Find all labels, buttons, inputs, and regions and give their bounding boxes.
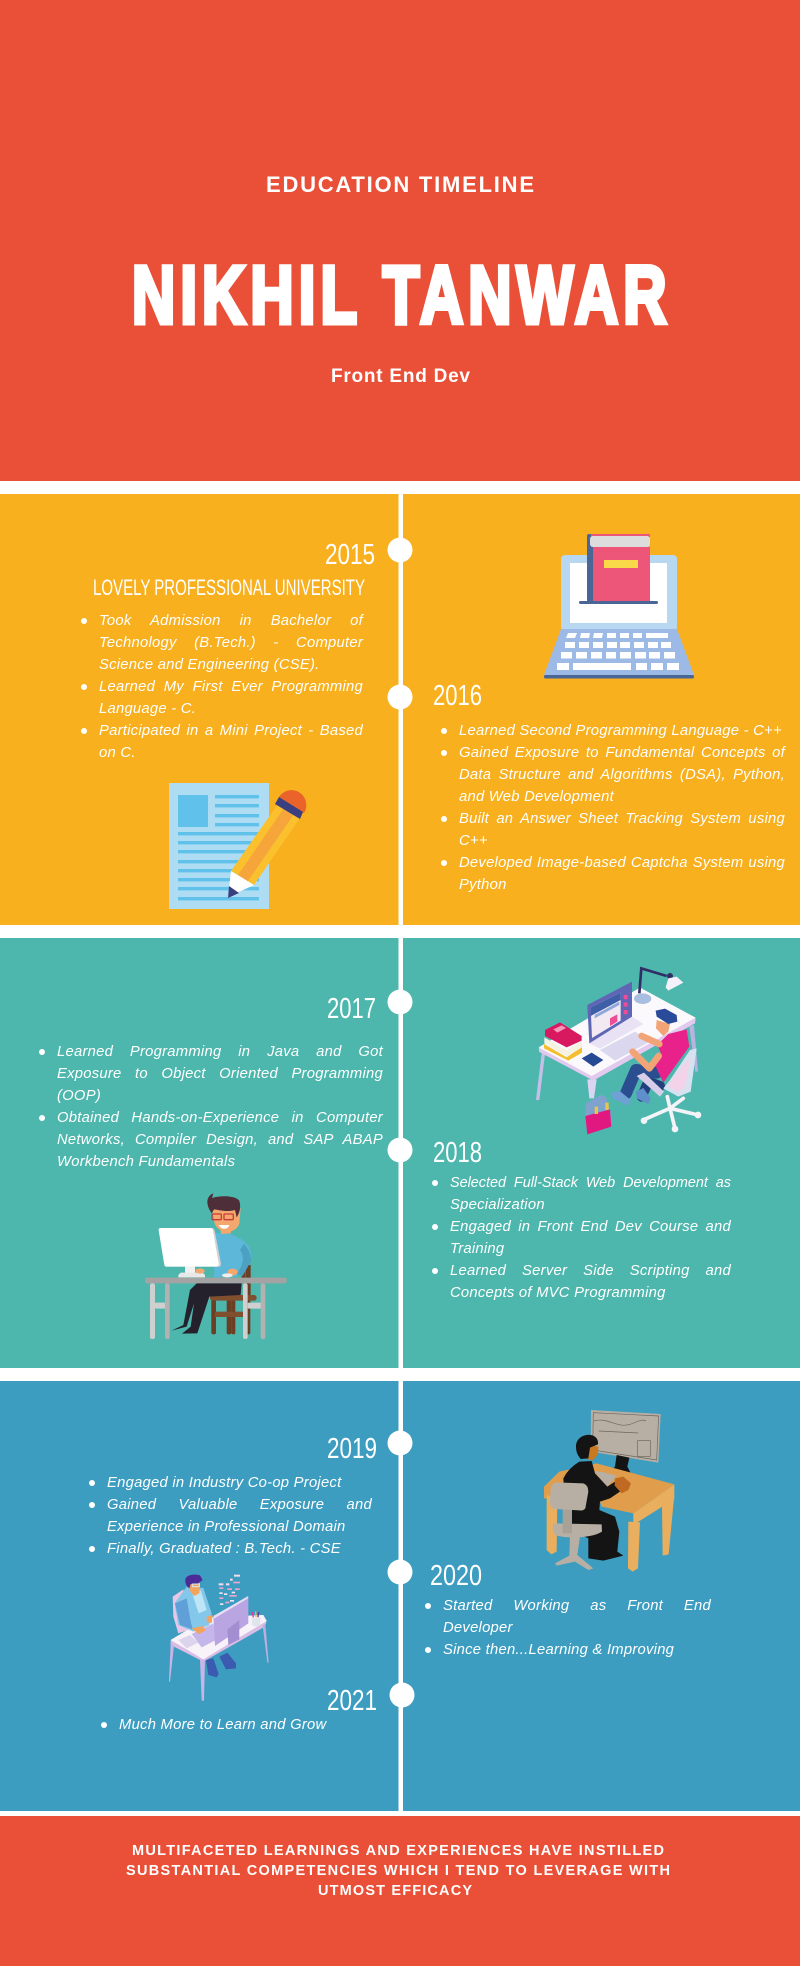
icon: isometric developer at desk [169,1575,269,1701]
panel: footer band [0,1816,800,1966]
eyebrow heading: EDUCATION TIMELINE [266,172,534,197]
text block: 2018 bullets: Learned Server Side Scripting and [450,1263,731,1279]
text block: 2015 bullets: on C. [99,745,136,761]
text block: 2017 bullets: Obtained Hands-on-Experience in Computer [57,1110,383,1126]
text block: 2015 bullets [81,613,364,761]
text block: 2017 bullets: Workbench Fundamentals [57,1154,235,1170]
icon: man with glasses at computer [145,1193,287,1339]
text block: 2016 bullets [441,723,786,893]
text block: 2015 bullets: Took Admission in Bachelor of [99,613,363,629]
text block: 2017 bullets [39,1044,384,1170]
icon: isometric student at desk [536,968,701,1134]
text block: 2019 bullets: Gained Valuable Exposure and [107,1497,372,1513]
title: NIKHIL TANWAR [132,250,672,341]
year 2020: 2020 [430,1560,482,1592]
panel: header band [0,0,800,481]
timeline nodes [388,538,414,1708]
text block: 2016 bullets: Python [459,877,507,893]
text block: 2017 bullets: Networks, Compiler Design, and SAP ABAP [57,1132,383,1148]
text block: 2018 bullets [432,1175,732,1301]
footer statement: SUBSTANTIAL COMPETENCIES WHICH I TEND TO LEVERAGE WITH [126,1863,670,1879]
university name: LOVELY PROFESSIONAL UNIVERSITY [93,575,365,600]
text block: 2021 bullet: Much More to Learn and Grow [119,1717,326,1733]
year 2019: 2019 [327,1433,377,1465]
text block: 2020 bullets: Developer [443,1620,513,1636]
text block: 2015 bullets: Learned My First Ever Programming [99,679,363,695]
icon: man in black at wooden desk [544,1410,674,1572]
text block: 2018 bullets: Concepts of MVC Programming [450,1285,666,1301]
year 2016: 2016 [433,680,482,712]
text block: 2016 bullets: Learned Second Programming Language - C++ [459,723,782,739]
footer statement [126,1843,670,1899]
year 2015: 2015 [325,539,375,571]
text block: 2020 bullets [425,1598,712,1658]
text block: 2020 bullets: Started Working as Front End [443,1598,711,1614]
panel: 2019-2021 band [0,1381,800,1811]
panel: 2017-2018 band [0,938,800,1368]
year 2021: 2021 [327,1685,377,1717]
text block: 2015 bullets: Language - C. [99,701,196,717]
text block: 2018 bullets: Selected Full-Stack Web Development as [450,1175,731,1191]
text block: 2017 bullets: Learned Programming in Java and Got [57,1044,383,1060]
text block: 2016 bullets: and Web Development [459,789,614,805]
timeline vertical line [398,481,403,1816]
year 2017: 2017 [327,993,376,1025]
text block: 2015 bullets: Participated in a Mini Project - Based [99,723,363,739]
text block: 2017 bullets: (OOP) [57,1088,101,1104]
footer statement: MULTIFACETED LEARNINGS AND EXPERIENCES HAVE INSTILLED [132,1843,664,1859]
text block: 2020 bullets: Since then...Learning & Improving [443,1642,674,1658]
text block: 2016 bullets: C++ [459,833,488,849]
subtitle: Front End Dev [331,366,470,387]
text block: 2018 bullets: Training [450,1241,504,1257]
text block: 2015 bullets: Science and Engineering (CSE). [99,657,320,673]
year 2018: 2018 [433,1137,482,1169]
text block: 2017 bullets: Exposure to Object Oriented Programming [57,1066,383,1082]
text block: 2016 bullets: Gained Exposure to Fundamental Concepts of [459,745,785,761]
panel: 2015-2016 band [0,494,800,925]
text block: 2015 bullets: Technology (B.Tech.) - Computer [99,635,363,651]
icon: laptop with book [544,534,694,678]
text block: 2019 bullets: Finally, Graduated : B.Tech. - CSE [107,1541,341,1557]
text block: 2019 bullets: Engaged in Industry Co-op Project [107,1475,341,1491]
text block: 2018 bullets: Specialization [450,1197,545,1213]
text block: 2016 bullets: Developed Image-based Captcha System using [459,855,785,871]
text block: 2018 bullets: Engaged in Front End Dev Course and [450,1219,731,1235]
text block: 2019 bullets [89,1475,372,1557]
text block: 2016 bullets: Data Structure and Algorithms (DSA), Python, [459,767,785,783]
text block: 2019 bullets: Experience in Professional Domain [107,1519,346,1535]
icon: document and pencil [169,783,306,909]
footer statement: UTMOST EFFICACY [318,1883,472,1899]
text block: 2016 bullets: Built an Answer Sheet Tracking System using [459,811,785,827]
